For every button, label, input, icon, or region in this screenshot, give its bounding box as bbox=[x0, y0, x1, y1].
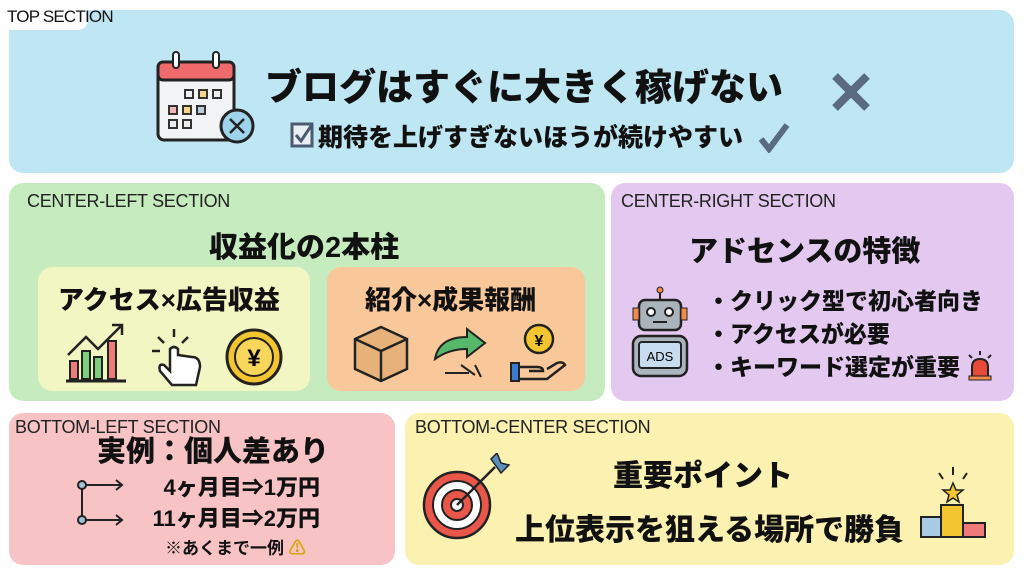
sub-panel: affiliate bbox=[327, 267, 585, 391]
icon: box bbox=[354, 326, 408, 382]
heading: 実例：個人差あり bbox=[97, 436, 329, 468]
text: examples: 11ヶ月目⇒2万円 bbox=[152, 506, 320, 531]
panel: center-right bbox=[611, 183, 1014, 401]
text: 上位表示を狙える場所で勝負 bbox=[515, 514, 904, 547]
text: subtitle: 期待を上げすぎないほうが続けやすい bbox=[318, 124, 743, 152]
icon: chart bbox=[66, 324, 126, 382]
text: examples: 4ヶ月目⇒1万円 bbox=[164, 475, 320, 500]
panel: center-left bbox=[9, 183, 605, 401]
list: features bbox=[707, 288, 983, 380]
label: BOTTOM-CENTER SECTION bbox=[415, 417, 650, 437]
icon: calendar bbox=[156, 51, 254, 144]
icon: check bbox=[758, 123, 790, 153]
sub-panel: ads: アクセス×広告収益 bbox=[58, 285, 280, 315]
heading: main: ブログはすぐに大きく稼げない bbox=[265, 67, 783, 108]
heading: アドセンスの特徴 bbox=[689, 236, 920, 268]
label: CENTER-RIGHT SECTION bbox=[621, 191, 836, 211]
icon: hand yen: ¥ bbox=[535, 333, 544, 350]
icon: robot: ADS bbox=[647, 349, 674, 364]
panel: bottom-center bbox=[405, 413, 1014, 565]
icon: checkbox bbox=[290, 122, 314, 148]
label: top section: TOP SECTION bbox=[7, 7, 113, 26]
heading: 収益化の2本柱 bbox=[209, 232, 399, 264]
label: top section bbox=[0, 0, 88, 30]
icon: robot bbox=[632, 286, 688, 378]
icon: hand yen bbox=[510, 324, 566, 382]
list: features: ・クリック型で初心者向き bbox=[707, 288, 983, 314]
label: CENTER-LEFT SECTION bbox=[27, 191, 230, 211]
text: examples bbox=[152, 475, 320, 531]
icon: pointer bbox=[152, 329, 202, 386]
list: features: ・キーワード選定が重要 bbox=[707, 354, 960, 380]
panel: bottom-left bbox=[9, 413, 395, 565]
sub-panel: ads bbox=[38, 267, 310, 391]
label: BOTTOM-LEFT SECTION bbox=[15, 417, 221, 437]
icon: yen coin bbox=[226, 328, 282, 386]
list: features: ・アクセスが必要 bbox=[707, 321, 890, 347]
note: ※あくまで一例 ⚠ bbox=[165, 539, 306, 558]
sub-panel: affiliate: 紹介×成果報酬 bbox=[365, 285, 536, 315]
icon: timeline bbox=[77, 479, 124, 526]
heading: 重要ポイント bbox=[613, 460, 793, 493]
icon: arrow bbox=[434, 327, 486, 378]
icon: podium bbox=[920, 467, 986, 538]
panel: top bbox=[9, 10, 1014, 173]
icon: cross bbox=[832, 73, 870, 111]
icon: target bbox=[422, 453, 510, 540]
icon: yen coin: ¥ bbox=[247, 345, 261, 372]
icon: alarm bbox=[968, 351, 992, 380]
